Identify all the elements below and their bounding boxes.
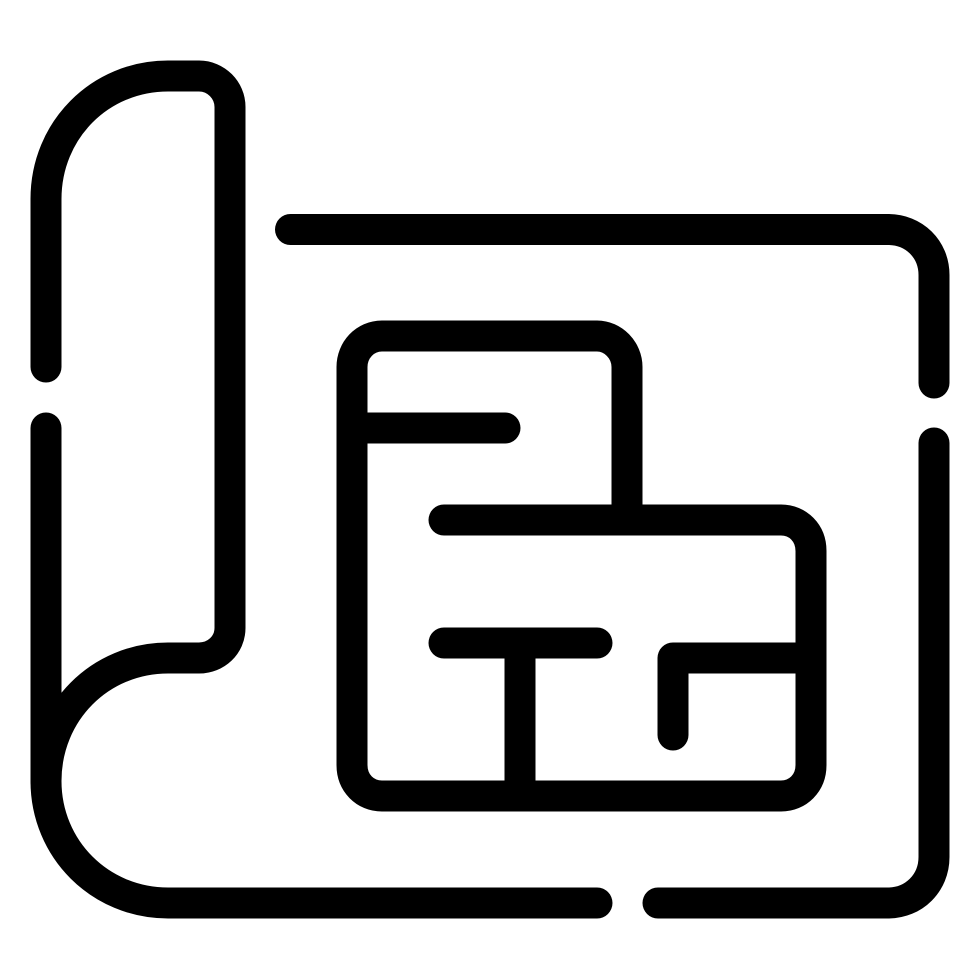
floor plan — [352, 336, 811, 796]
sheet outline — [290, 230, 934, 903]
paper roll flap — [46, 76, 597, 903]
